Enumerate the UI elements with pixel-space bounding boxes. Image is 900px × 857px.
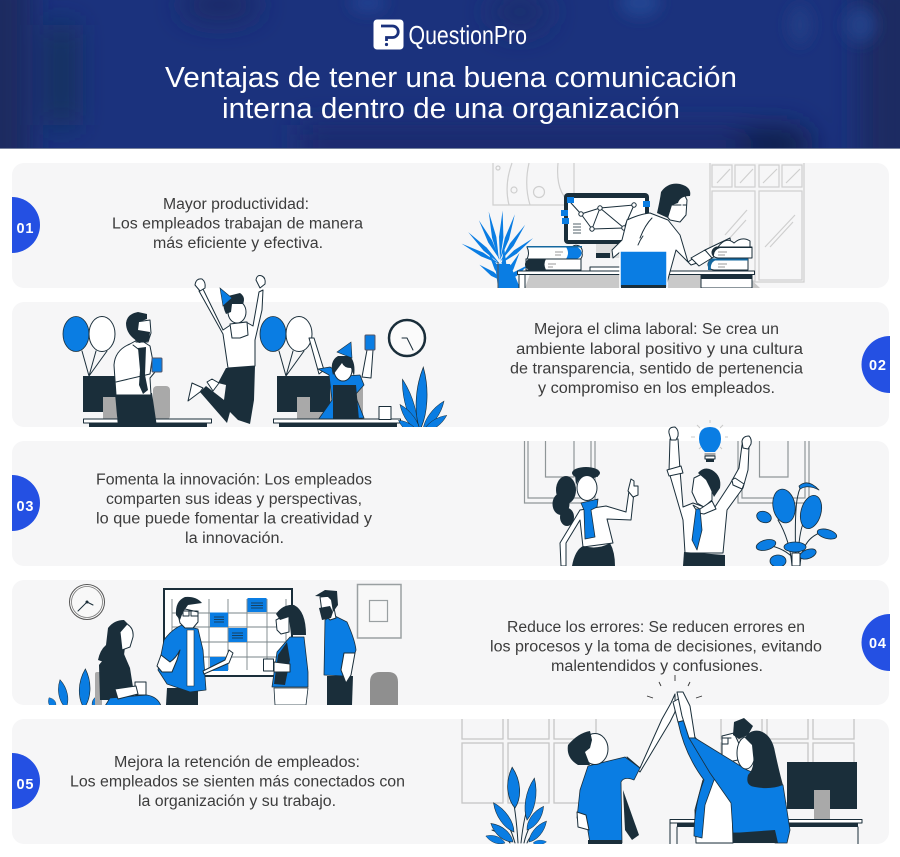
illustration: sharing ideas bbox=[524, 420, 838, 567]
illustration: team at planning board bbox=[46, 584, 401, 710]
badge 05 bbox=[12, 753, 40, 809]
plant bbox=[755, 483, 838, 567]
icon: logo square bbox=[374, 20, 404, 50]
plant bbox=[48, 668, 96, 705]
monitor and desk bbox=[670, 762, 862, 844]
wall art bbox=[493, 163, 574, 205]
text block 04 bbox=[490, 619, 822, 675]
badge 01 bbox=[12, 197, 40, 253]
man and woman high-fiving bbox=[673, 692, 790, 843]
blue chair bbox=[620, 251, 667, 288]
text block 04: malentendidos y confusiones. bbox=[551, 658, 763, 675]
desk bbox=[518, 271, 760, 288]
badge 03: 03 bbox=[16, 499, 34, 515]
planning board bbox=[164, 589, 292, 676]
window panes bbox=[462, 719, 854, 803]
woman with mug bbox=[264, 605, 308, 705]
presenting man bbox=[157, 597, 233, 705]
picture frame bbox=[358, 584, 401, 638]
text block 01: más eficiente y efectiva. bbox=[153, 235, 323, 252]
badge 05: 05 bbox=[16, 777, 34, 793]
text block 03 bbox=[96, 472, 372, 547]
seated woman bbox=[95, 620, 161, 706]
jumping man bbox=[188, 276, 265, 424]
sparkle rays bbox=[647, 675, 702, 698]
window bbox=[710, 163, 804, 282]
text block 05: Mejora la retención de empleados: bbox=[114, 754, 360, 771]
panel: 04 errores bbox=[12, 580, 890, 710]
monitor with chart bbox=[561, 193, 650, 271]
text block 01 bbox=[112, 196, 363, 252]
text block 03: lo que puede fomentar la creatividad y bbox=[96, 510, 372, 528]
header banner bbox=[0, 0, 900, 149]
illustration: office celebration bbox=[63, 276, 449, 437]
text block 03: comparten sus ideas y perspectivas, bbox=[106, 491, 362, 508]
lightbulb bbox=[691, 420, 728, 462]
balloons left bbox=[63, 316, 115, 376]
title bbox=[165, 62, 737, 125]
logo wordmark: QuestionPro bbox=[408, 20, 527, 50]
text block 03: Fomenta la innovación: Los empleados bbox=[96, 472, 372, 488]
wall clock bbox=[70, 584, 104, 620]
badge 04 bbox=[862, 614, 890, 671]
title: Ventajas de tener una buena comunicación bbox=[165, 62, 737, 94]
desk and monitor left bbox=[83, 376, 212, 427]
bearded man bbox=[114, 312, 162, 427]
text block 01: Los empleados trabajan de manera bbox=[112, 216, 363, 232]
clock bbox=[389, 320, 425, 356]
text block 03: la innovación. bbox=[185, 530, 284, 547]
chair bbox=[370, 672, 398, 705]
text block 05: Los empleados se sienten más conectados con bbox=[70, 774, 405, 790]
text block 02: ambiente laboral positivo y una cultura bbox=[516, 341, 803, 358]
text block 02: Mejora el clima laboral: Se crea un bbox=[534, 321, 779, 338]
title: interna dentro de una organización bbox=[222, 93, 680, 125]
illustration: high five bbox=[462, 675, 862, 846]
bearded man standing bbox=[315, 590, 356, 705]
plant bbox=[461, 210, 534, 288]
man high-fiving bbox=[568, 694, 675, 844]
wall frames bbox=[524, 441, 809, 503]
plant bbox=[398, 366, 448, 427]
text block 02: y compromiso en los empleados. bbox=[538, 380, 775, 397]
right books bbox=[708, 239, 752, 270]
text block 04: los procesos y la toma de decisiones, evitando bbox=[490, 638, 822, 656]
panel: 02 clima laboral bbox=[12, 276, 890, 437]
logo: QuestionPro bbox=[374, 20, 527, 50]
panel: 05 retención bbox=[12, 675, 889, 846]
badge 02: 02 bbox=[869, 358, 886, 374]
text block 02 bbox=[510, 321, 803, 397]
badge 02 bbox=[862, 336, 890, 393]
balloons right bbox=[260, 316, 312, 376]
person bbox=[612, 184, 731, 290]
text block 05 bbox=[70, 754, 405, 810]
text block 02: de transparencia, sentido de pertenencia bbox=[510, 360, 803, 378]
plant bbox=[485, 767, 550, 846]
panel: 01 productividad bbox=[12, 163, 889, 290]
text block 01: Mayor productividad: bbox=[163, 196, 309, 213]
man celebrating bbox=[667, 427, 751, 566]
left books bbox=[525, 245, 582, 270]
badge 03 bbox=[12, 475, 40, 531]
badge 01: 01 bbox=[16, 221, 34, 237]
woman with thumbs up bbox=[552, 467, 638, 566]
text block 05: la organización y su trabajo. bbox=[138, 793, 336, 810]
text block 04: Reduce los errores: Se reducen errores en bbox=[507, 619, 805, 636]
woman at desk bbox=[274, 335, 400, 427]
panel: 03 innovación bbox=[12, 420, 889, 567]
illustration: employee at desk with chart bbox=[461, 163, 804, 290]
badge 04: 04 bbox=[869, 636, 886, 652]
